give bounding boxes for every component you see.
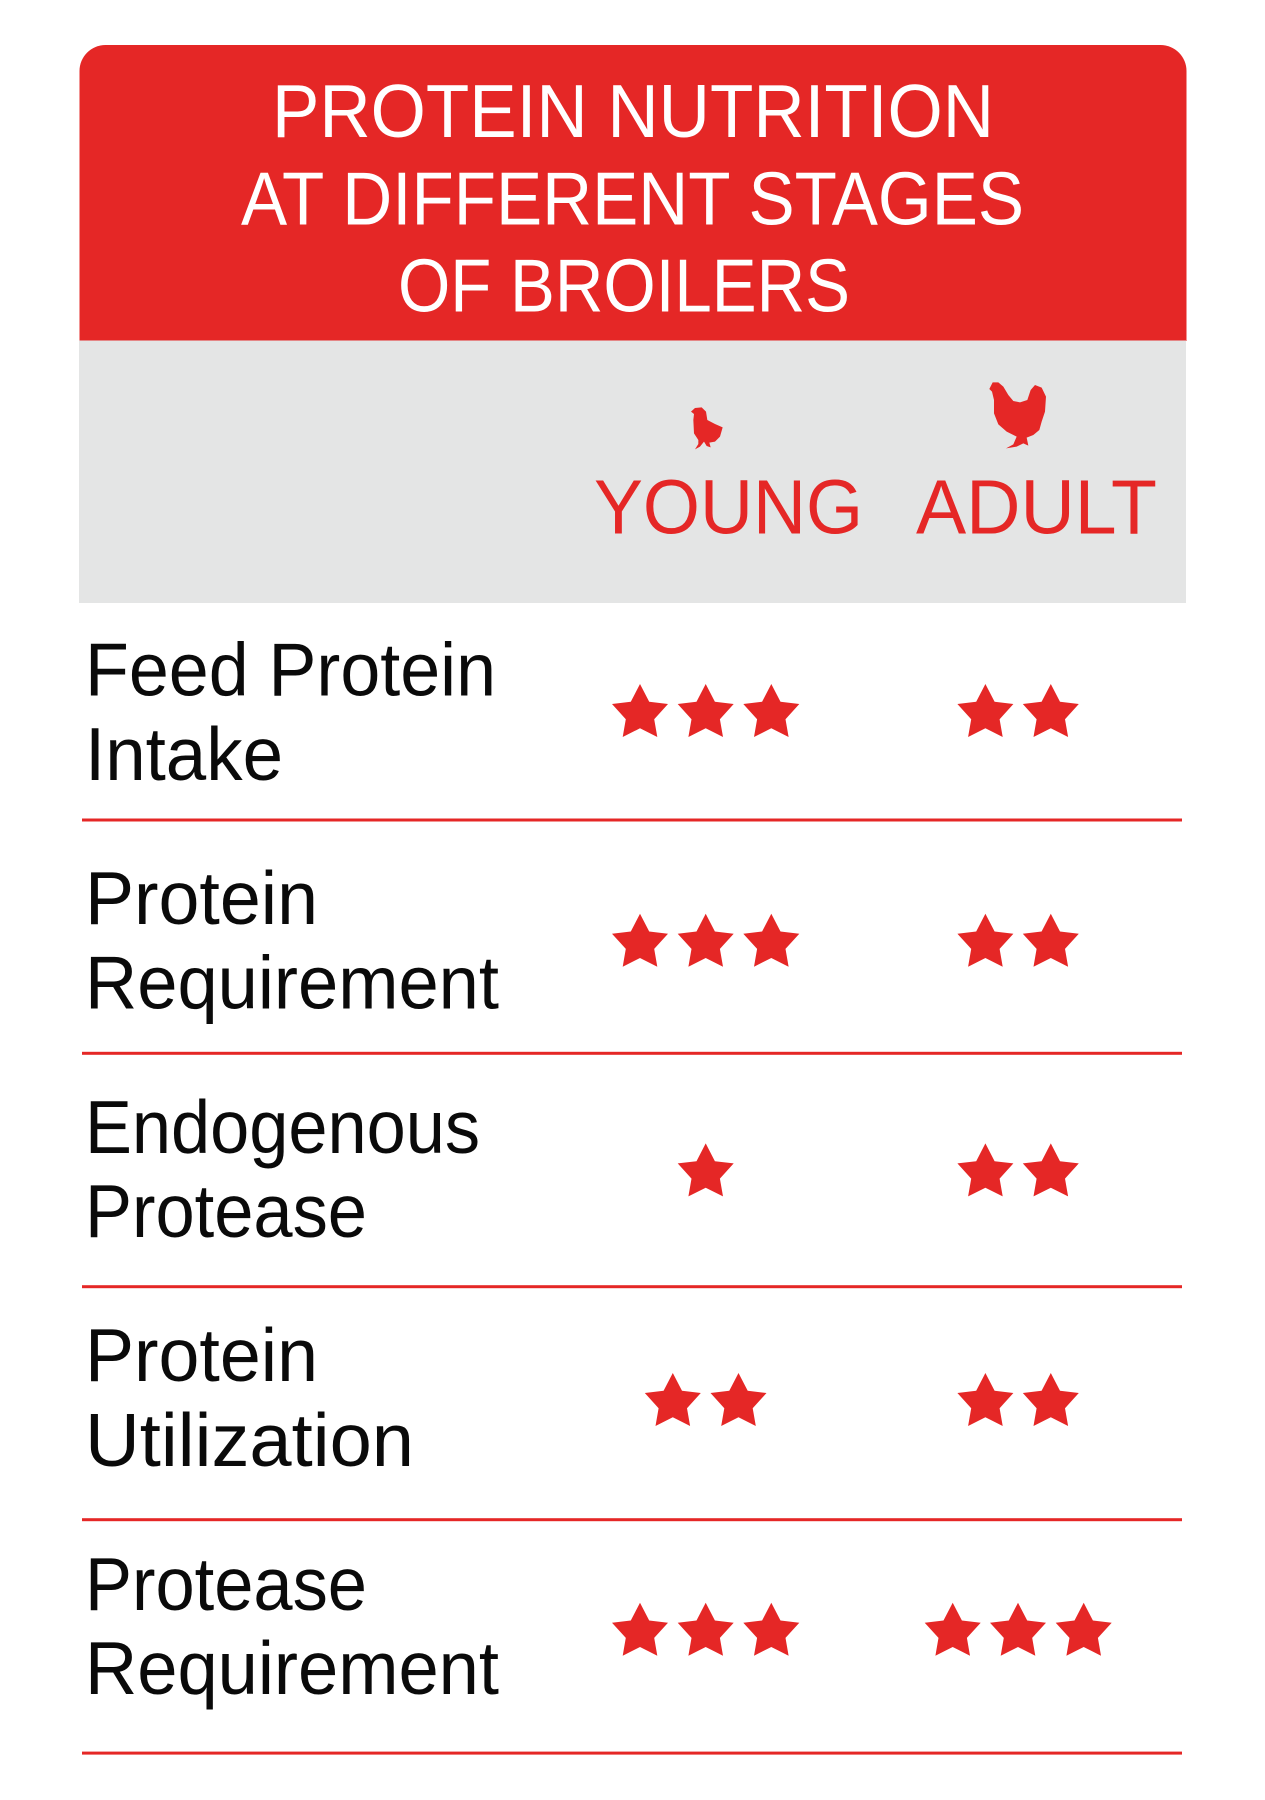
young rating: 3 stars — [612, 1603, 799, 1656]
row label — [85, 1313, 414, 1482]
adult rating: 2 stars — [957, 914, 1079, 967]
row label — [85, 856, 499, 1024]
row label: Intake — [85, 712, 283, 796]
young rating: 2 stars — [645, 1373, 766, 1426]
row label: Protein — [85, 856, 318, 940]
young rating: 1 star — [678, 1143, 734, 1196]
icon: hen — [989, 382, 1046, 448]
row label: Protease — [85, 1169, 367, 1253]
title — [241, 69, 1024, 328]
row label — [85, 1542, 499, 1710]
row: protease requirement — [85, 1542, 1112, 1710]
title: PROTEIN NUTRITION — [272, 69, 994, 153]
young rating: 3 stars — [612, 914, 799, 967]
row: endogenous protease — [85, 1085, 1079, 1253]
row label: Feed Protein — [85, 628, 496, 712]
column header panel — [79, 340, 1186, 603]
title: OF BROILERS — [398, 244, 850, 328]
row label: Requirement — [85, 940, 499, 1024]
row label: Endogenous — [85, 1085, 480, 1169]
row label: Protease — [85, 1542, 367, 1626]
row: protein utilization — [85, 1313, 1079, 1482]
adult rating: 3 stars — [925, 1603, 1112, 1656]
young rating: 3 stars — [612, 684, 799, 737]
row label: Protein — [85, 1313, 318, 1397]
icon: chick — [691, 407, 723, 449]
title: AT DIFFERENT STAGES — [241, 156, 1024, 240]
row: protein requirement — [85, 856, 1079, 1024]
column heading: adult: ADULT — [916, 464, 1157, 550]
row label: Utilization — [85, 1398, 414, 1482]
row label — [85, 628, 496, 796]
row: feed protein intake — [85, 628, 1079, 796]
adult rating: 2 stars — [957, 1143, 1079, 1196]
header banner — [80, 45, 1186, 341]
row label — [85, 1085, 480, 1253]
adult rating: 2 stars — [957, 1373, 1079, 1426]
column heading: young: YOUNG — [594, 464, 863, 550]
adult rating: 2 stars — [957, 684, 1079, 737]
row label: Requirement — [85, 1626, 499, 1710]
